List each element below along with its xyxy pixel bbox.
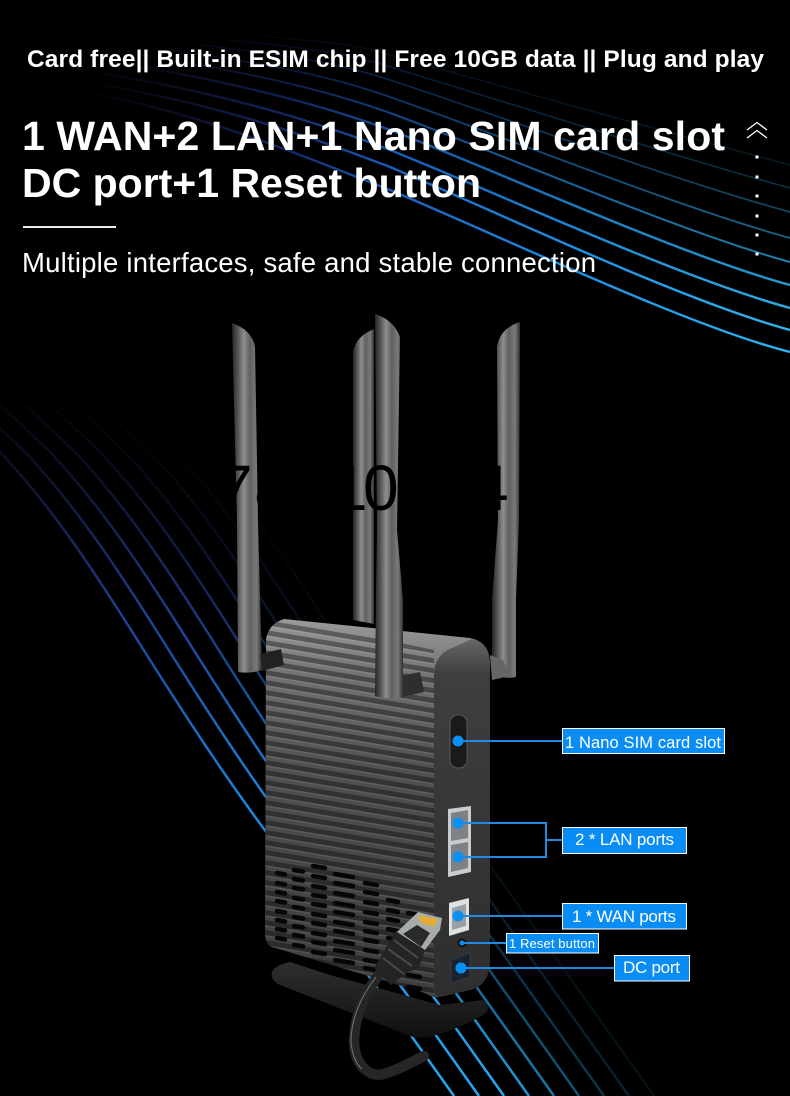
left antenna [232, 323, 262, 673]
gold contacts [418, 915, 438, 927]
faint numbers over the antennas [217, 452, 509, 524]
callout: DC port: DC port [623, 958, 680, 977]
clear RJ45 head [397, 912, 442, 950]
antenna connectors [260, 649, 284, 671]
router stand [272, 962, 488, 1038]
callout: WAN ports: 1 * WAN ports [572, 907, 676, 926]
DC jack [451, 953, 470, 983]
heading divider [23, 226, 116, 228]
router front panel [265, 619, 490, 997]
WAN port [449, 898, 469, 936]
callout: SIM slot [452, 728, 724, 754]
cable cord [354, 972, 424, 1075]
callout: reset button [460, 934, 598, 953]
callout: LAN ports: 2 * LAN ports [575, 830, 674, 849]
callout: SIM slot: 1 Nano SIM card slot [565, 734, 721, 752]
back antenna [353, 329, 374, 624]
front ribbing [265, 619, 434, 995]
callout: WAN ports [452, 904, 686, 929]
lower diagonal blue light lines [0, 310, 654, 1096]
top tagline: Card free|| Built-in ESIM chip || Free 10GB data || Plug and play [27, 46, 764, 73]
reset hole [458, 938, 466, 948]
ventilation slots [277, 866, 420, 989]
network cable [351, 912, 442, 1075]
faint numbers over the antennas: 7 [217, 452, 253, 524]
heading: 1 WAN+2 LAN+1 Nano SIM card slot [22, 113, 725, 159]
right antenna [492, 322, 520, 678]
faint numbers over the antennas: 0 [363, 452, 399, 524]
faint numbers over the antennas: 8 [254, 452, 290, 524]
LAN ports [448, 806, 471, 877]
heading [22, 113, 725, 206]
heading: DC port+1 Reset button [22, 160, 481, 206]
callout: DC port [456, 956, 690, 981]
front antenna [375, 314, 403, 698]
subheading: Multiple interfaces, safe and stable connection [22, 247, 596, 278]
ports on the router side [448, 715, 471, 983]
plug boot [374, 930, 425, 985]
faint numbers over the antennas: 4 [473, 452, 509, 524]
upper curved blue light lines [80, 36, 790, 352]
callout: reset button: 1 Reset button [509, 936, 595, 951]
icon: scroll-up chevrons and dots [747, 122, 767, 256]
faint numbers over the antennas: 1 [332, 452, 368, 524]
router product [232, 314, 520, 1038]
callout: LAN ports [452, 818, 686, 862]
callouts [452, 728, 724, 981]
router side panel [434, 639, 490, 997]
SIM card slot [450, 715, 467, 768]
